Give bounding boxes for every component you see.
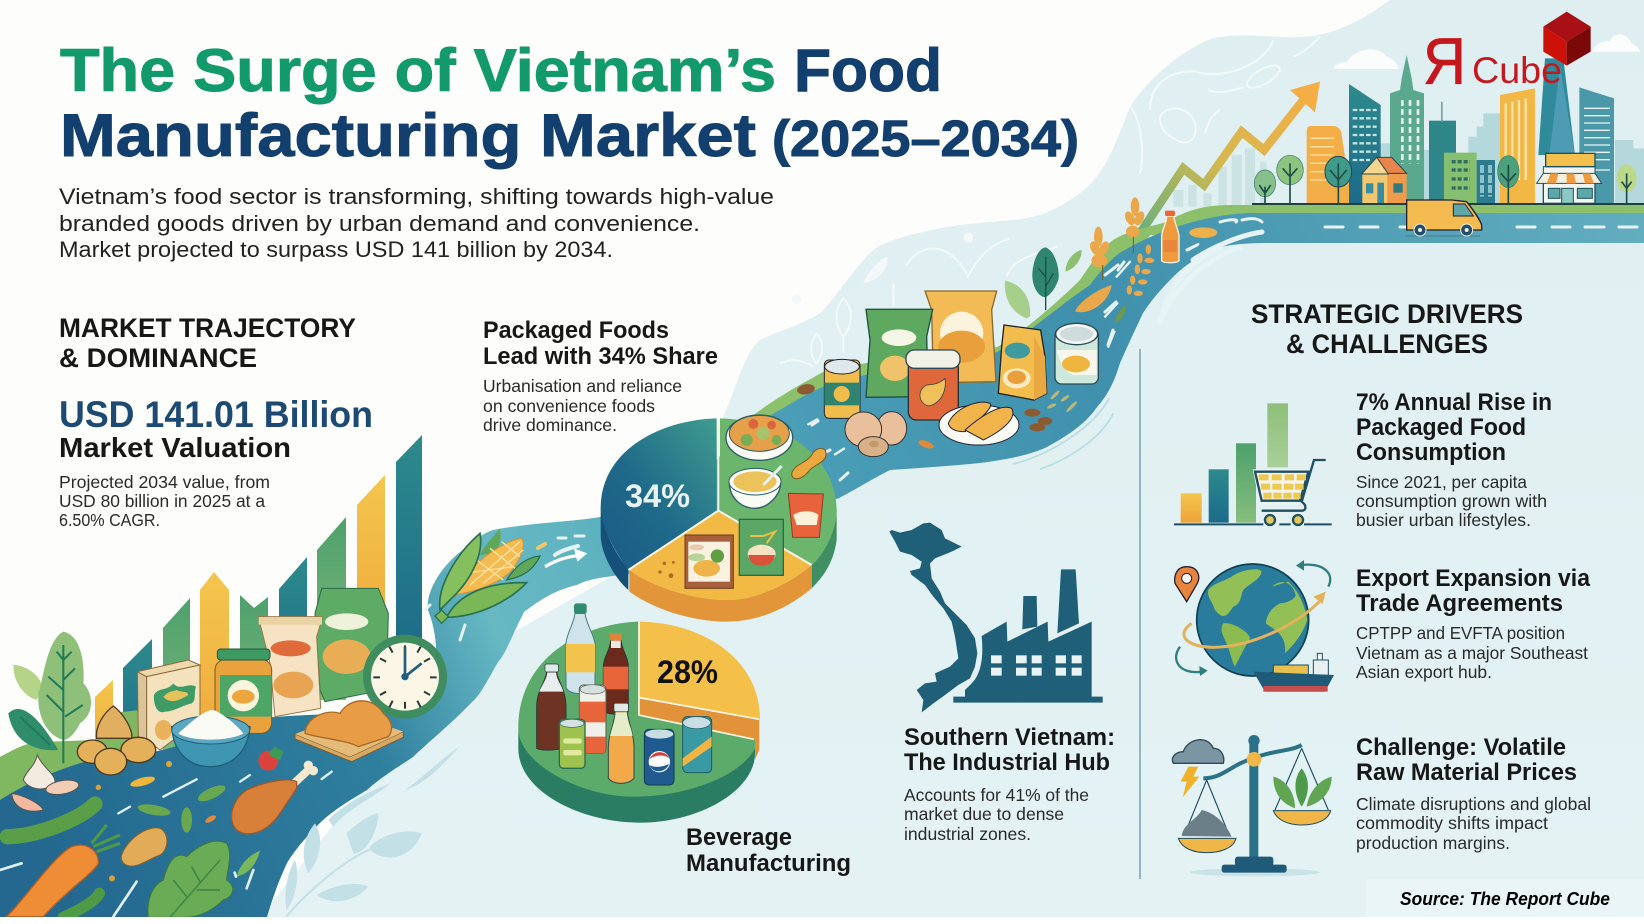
text: southern vietnam description [904,785,1089,844]
heading: strategic drivers: STRATEGIC DRIVERS [1251,299,1523,329]
icon: globe with trade routes [1175,560,1334,692]
icon: jam jar [215,649,272,733]
pie side [601,507,628,590]
faded bars behind arrow [1173,148,1267,207]
title [60,37,1079,169]
text block: packaged food consumption: consumption grown with [1356,491,1547,511]
text block: export expansion: Vietnam as a major Southeast [1356,643,1588,663]
text block: packaged food consumption: busier urban lifestyles. [1356,510,1531,530]
text block: raw material prices: production margins. [1356,833,1510,853]
crumbs [658,561,675,578]
icon: snack packet [685,535,733,588]
icon: green bag [866,309,933,397]
heading: beverage manufacturing: Beverage [686,824,792,851]
pale water streaks [1013,398,1113,469]
icon: small leaves and peas [63,761,260,917]
divider [1139,349,1141,879]
icon: orange jar [906,350,960,420]
heading: market trajectory: & DOMINANCE [59,343,257,373]
icon: leafy plant [8,632,91,763]
icon: tomato [258,747,283,771]
river road flowing to the city [0,213,1644,917]
icon: chicken drumstick [231,761,318,834]
icon: orange bottle [608,703,634,783]
icon: can left [824,359,860,418]
building: green spire [1390,55,1424,203]
icon: peanut [792,448,826,479]
building: dark green [1429,102,1456,203]
percentage label: 34: 34% [625,478,690,514]
icon: wheat stalks [1075,197,1217,312]
title: Manufacturing Market [60,102,756,169]
panel: left food stream [0,588,460,920]
stat: market valuation: USD 141.01 Billion [59,394,373,435]
text: packaged foods description: Urbanisation and reliance [483,376,682,396]
icon: teal can [683,717,712,773]
text block: packaged food consumption [1356,389,1552,530]
text block: export expansion: Asian export hub. [1356,662,1492,682]
text: valuation description: Projected 2034 value, from [59,472,270,492]
text block: raw material prices: Climate disruptions and global [1356,794,1591,814]
text block: export expansion [1356,565,1591,682]
heading: strategic drivers [1251,299,1523,359]
icon: clock [363,635,447,719]
icon: vietnam map and factory [889,523,1103,712]
text: southern vietnam description: industrial zones. [904,824,1031,844]
building: green small [1444,153,1495,203]
background skyline [1380,113,1644,203]
green land bank left [0,710,160,800]
icon: potato [121,828,167,866]
logo: RCube [1423,12,1591,98]
text: valuation description: 6.50% CAGR. [59,510,160,530]
icon: green can [559,719,585,768]
icon: tan snack bag [258,617,323,717]
text block: export expansion: CPTPP and EVFTA position [1356,623,1565,643]
icon: nuts and grains [796,383,1078,450]
heading: packaged foods: Lead with 34% Share [483,343,718,370]
icon: leaves [1005,250,1125,323]
icon: garlic [12,755,80,811]
sector: yellow [629,512,812,600]
icon: tree [1032,247,1059,310]
clouds [1333,34,1640,69]
heading: market trajectory [59,313,356,373]
text block: export expansion: Export Expansion via [1356,565,1591,592]
icon: carrot [7,825,120,917]
text block: raw material prices: Raw Material Prices [1356,759,1577,786]
logo: RCube: Cube [1472,50,1562,91]
text block: raw material prices: Challenge: Volatile [1356,734,1566,761]
white swirls in sky [1130,37,1320,173]
heading: southern vietnam [904,724,1115,776]
icon: store [1537,153,1602,203]
text block: packaged food consumption: Consumption [1356,439,1506,466]
building: yellow tall [1500,88,1535,203]
icon: plate of bread [939,402,1019,445]
icon: bar chart with shopping cart [1174,403,1332,525]
pale leaf watermark [283,747,460,920]
heading: packaged foods: Packaged Foods [483,317,669,344]
bottom white strip [0,917,1644,924]
logo: RCube: Я [1423,24,1466,98]
arrow: flow into pie [545,548,587,567]
source note: Source: The Report Cube [1400,888,1610,909]
icon: tin can [1055,323,1098,384]
building: teal [1349,84,1381,203]
stat: market valuation [59,394,373,463]
heading: packaged foods [483,317,718,370]
panel: upper food stream [796,197,1220,469]
title: (2025–2034) [772,110,1079,167]
icon: salad bowl [726,415,793,460]
heading: strategic drivers: & CHALLENGES [1286,329,1488,359]
icon: potatoes [77,706,156,775]
icon: cola bottle left [537,664,566,750]
icon: eggs and mushroom [845,412,907,457]
percentage label: 28: 28% [657,654,718,690]
text block: raw material prices: commodity shifts impact [1356,813,1548,833]
stat: market valuation: Market Valuation [59,432,291,463]
heading: market trajectory: MARKET TRAJECTORY [59,313,356,343]
text: packaged foods description: drive dominance. [483,415,617,435]
icon: cucumber [7,804,95,837]
text: valuation description: USD 80 billion in 2025 at a [59,491,265,511]
icon: green packet [739,519,783,575]
title: The Surge of Vietnam’s [60,37,776,104]
river streaks [808,244,1198,454]
icon: blue cola can [644,729,674,785]
source patch [1366,879,1644,917]
pale decorative swirls [780,234,1057,367]
icon: milk box [998,325,1047,400]
text: southern vietnam description: market due to dense [904,804,1064,824]
ground line [1252,203,1644,205]
green river bank upper [735,205,1644,470]
icon: water bottle [566,603,595,694]
subtitle text block: Market projected to surpass USD 141 billion by 2034. [59,237,613,262]
icon: noodle bowl [729,466,782,508]
river streaks [0,772,332,917]
heading: southern vietnam: Southern Vietnam: [904,724,1115,751]
text block: export expansion: Trade Agreements [1356,590,1563,617]
text block: packaged food consumption: Packaged Food [1356,414,1526,441]
icon: delivery van [1405,200,1482,236]
panel: beverage pie chart [518,603,760,823]
text block: raw material prices [1356,734,1591,853]
text block: packaged food consumption: Since 2021, per capita [1356,472,1527,492]
text: packaged foods description [483,376,682,435]
icon: cereal box [137,660,200,750]
heading: beverage manufacturing [686,824,851,877]
sector: 28 percent yellow [638,622,760,720]
sector: 34 percent teal [601,418,717,570]
icon: cola bottle right [603,633,628,714]
text block: packaged food consumption: 7% Annual Rise in [1356,389,1552,416]
text: packaged foods description: on convenience foods [483,396,655,416]
text: valuation description [59,472,270,530]
subtitle text block: branded goods driven by urban demand and convenience. [59,211,700,236]
subtitle text block: Vietnam’s food sector is transforming, shifting towards high-value [59,184,774,209]
city skyline illustration [1130,34,1644,207]
building: blue teal [1579,87,1614,203]
rising bar chart [95,435,422,780]
icon: balance scale [1172,735,1332,876]
pie side [518,728,755,823]
subtitle text block [59,184,774,262]
icon: green snack bag [315,588,388,702]
icon: yellow bag [925,291,997,383]
icon: corn cob [435,528,540,623]
green face [518,622,755,797]
building: tower [1538,58,1575,155]
panel: packaged foods pie chart [601,415,837,622]
icon: red and white can [579,685,606,753]
heading: southern vietnam: The Industrial Hub [904,749,1110,776]
road dashes and river streaks [425,219,1637,640]
building: orange [1307,126,1350,203]
icon: rice bowl [172,710,250,767]
icon: lettuce leaf [148,841,233,917]
icon: house [1362,157,1407,203]
pale streak [1162,248,1220,317]
arrow: growth trend [1140,82,1320,233]
icon: small snack pack [788,493,823,537]
title: Food [794,37,942,104]
heading: beverage manufacturing: Manufacturing [686,850,851,877]
icon: trees [1254,155,1637,203]
sector: green [720,418,837,565]
icon: juice bottle [1162,211,1179,263]
icon: bread on board [295,701,403,762]
text: southern vietnam description: Accounts for 41% of the [904,785,1089,805]
